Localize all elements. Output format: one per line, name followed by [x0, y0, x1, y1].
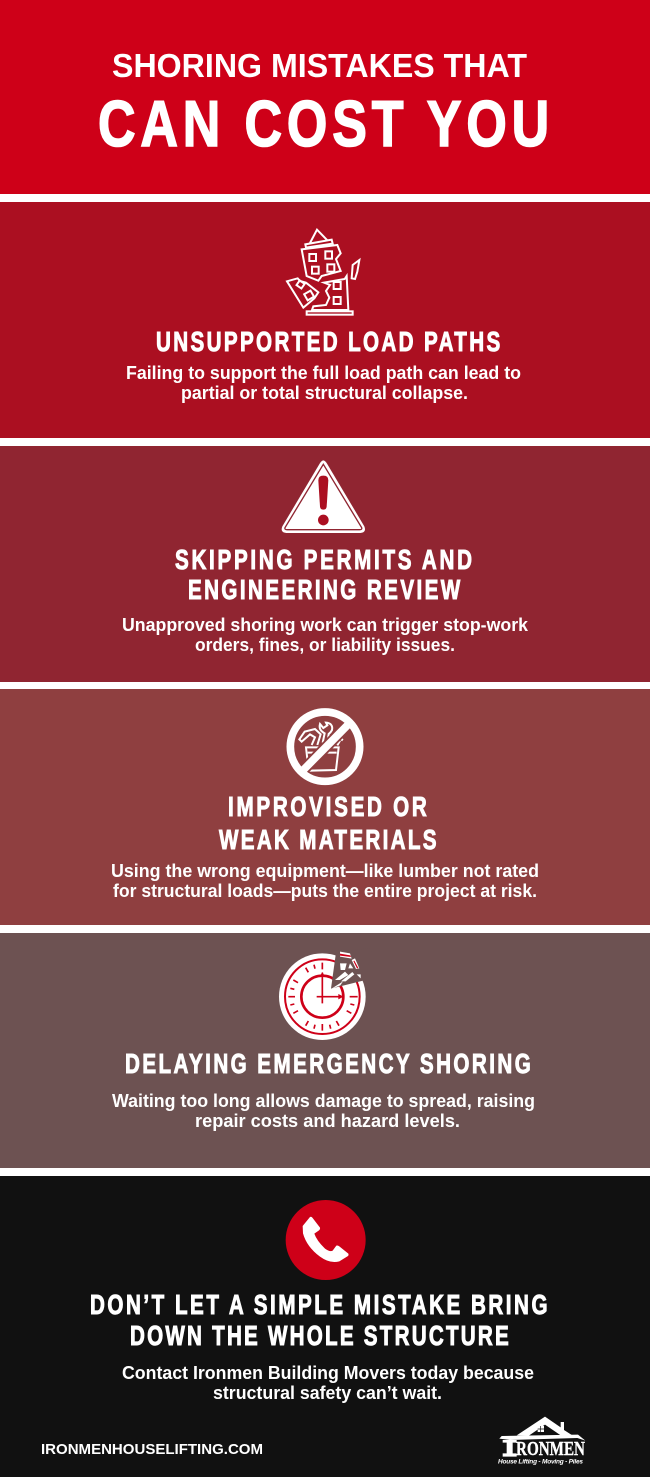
body text: Waiting too long allows damage to spread, raising: [112, 1091, 535, 1111]
heading: [219, 792, 436, 856]
body text: repair costs and hazard levels.: [195, 1111, 460, 1131]
panel: improvised materials: [0, 689, 650, 925]
panel: skipping permits: [0, 446, 650, 682]
body text: Contact Ironmen Building Movers today because: [122, 1363, 534, 1383]
icon: phone: [286, 1200, 366, 1280]
heading: [90, 1290, 548, 1352]
body text: Unapproved shoring work can trigger stop-work: [122, 615, 529, 635]
icon: warning triangle: [282, 460, 365, 533]
icon: prohibited tools: [290, 712, 360, 781]
heading: DON’T LET A SIMPLE MISTAKE BRING: [90, 1290, 548, 1321]
panel: delaying emergency shoring: [0, 933, 650, 1168]
icon: cracked clock: [279, 949, 372, 1040]
heading: SKIPPING PERMITS AND: [175, 545, 472, 576]
logo: Ironmen: RONMEN: [516, 1438, 585, 1460]
heading: UNSUPPORTED LOAD PATHS: [156, 327, 500, 358]
heading: IMPROVISED OR: [228, 792, 427, 823]
logo: Ironmen: House Lifting - Moving - Piles: [498, 1458, 583, 1466]
panel: header: [0, 0, 650, 194]
heading: DOWN THE WHOLE STRUCTURE: [130, 1321, 509, 1352]
body text: Using the wrong equipment—like lumber not rated: [111, 861, 539, 881]
body text: [126, 363, 521, 403]
website url: IRONMENHOUSELIFTING.COM: [41, 1441, 263, 1458]
heading: [175, 545, 472, 606]
body text: [122, 615, 529, 655]
panel: call to action: [0, 1176, 650, 1477]
heading: DELAYING EMERGENCY SHORING: [125, 1049, 531, 1080]
body text: [111, 861, 539, 901]
heading: WEAK MATERIALS: [219, 825, 436, 856]
body text: orders, fines, or liability issues.: [195, 635, 455, 655]
title line 2: CAN COST YOU: [98, 89, 549, 160]
icon: collapsing building: [287, 230, 359, 315]
heading: ENGINEERING REVIEW: [188, 575, 460, 606]
body text: Failing to support the full load path can lead to: [126, 363, 521, 383]
body text: structural safety can’t wait.: [213, 1383, 442, 1403]
body text: partial or total structural collapse.: [181, 383, 468, 403]
body text: [122, 1363, 534, 1403]
body text: for structural loads—puts the entire project at risk.: [113, 881, 537, 901]
logo: Ironmen: [498, 1417, 585, 1466]
title line 1: SHORING MISTAKES THAT: [112, 47, 527, 84]
panel: unsupported load paths: [0, 202, 650, 438]
body text: [112, 1091, 535, 1131]
